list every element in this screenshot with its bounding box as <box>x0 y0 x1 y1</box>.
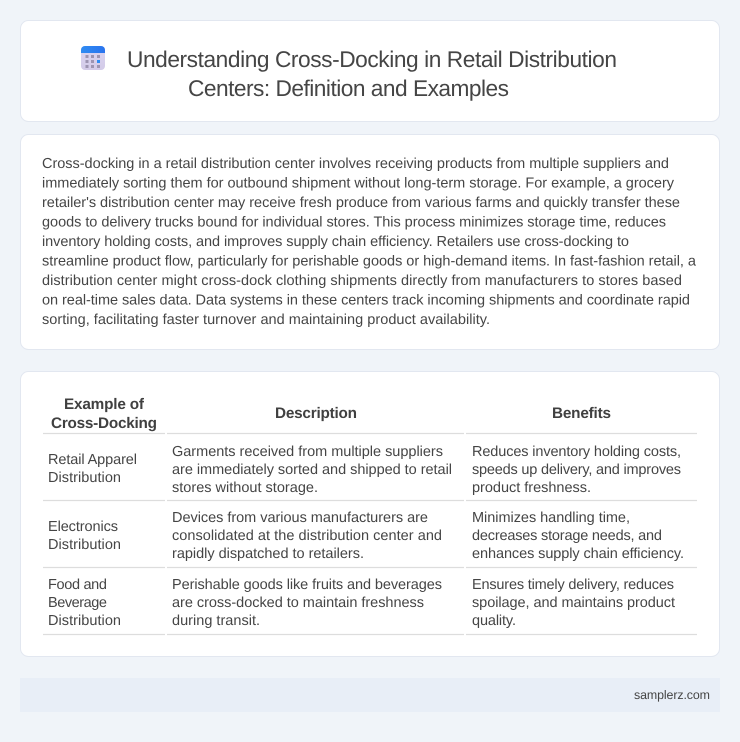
heading: title: Understanding Cross-Docking in Retail Distribution <box>127 46 617 72</box>
footer source text: samplerz.com <box>634 688 710 702</box>
text block: definition paragraph: immediately sorting them for outbound shipment without long-term storage. For example, a grocery <box>42 176 675 192</box>
table row: electronics: enhances supply chain efficiency. <box>472 546 684 562</box>
table row: electronics: consolidated at the distribution center and <box>172 528 442 544</box>
table header row <box>51 396 611 432</box>
table header row: Example of <box>64 396 145 413</box>
table row: food and beverage: Ensures timely delivery, reduces <box>472 577 674 593</box>
table row: food and beverage: quality. <box>472 613 516 629</box>
table row: electronics: Electronics <box>48 519 118 535</box>
table row: food and beverage: spoilage, and maintains product <box>472 595 675 611</box>
table row: food and beverage <box>48 577 675 629</box>
table row: electronics: Minimizes handling time, <box>472 510 630 526</box>
table header row: Cross-Docking <box>51 415 157 432</box>
text block: definition paragraph <box>42 156 697 328</box>
table row: electronics: rapidly dispatched to retailers. <box>172 546 364 562</box>
table row: retail apparel: speeds up delivery, and improves <box>472 462 681 478</box>
table row: electronics <box>48 510 684 562</box>
table row: electronics: decreases storage needs, and <box>472 528 662 544</box>
text block: definition paragraph: retailer's distribution center may receive fresh produce from various farms and quickly transfer these <box>42 195 680 211</box>
table row: retail apparel: are immediately sorted and shipped to retail <box>172 462 452 478</box>
text block: definition paragraph: sorting, facilitating faster turnover and maintaining product availability. <box>42 312 490 328</box>
text block: definition paragraph: Cross-docking in a retail distribution center involves receiving products from multiple suppliers and <box>42 156 669 172</box>
table row: retail apparel: Distribution <box>48 470 121 486</box>
table row: food and beverage: Distribution <box>48 613 121 629</box>
table row: food and beverage: Perishable goods like fruits and beverages <box>172 577 442 593</box>
table row: electronics: Devices from various manufacturers are <box>172 510 428 526</box>
table row: food and beverage: are cross-docked to maintain freshness <box>172 595 424 611</box>
table row: food and beverage: Food and <box>48 577 107 593</box>
text block: definition paragraph: inventory holding costs, and improves supply chain efficiency. Retailers use cross-docking to <box>42 234 629 250</box>
table row: retail apparel: product freshness. <box>472 480 591 496</box>
text block: definition paragraph: on real-time sales data. Data systems in these centers track incoming shipments and coordinate rapid <box>42 292 690 308</box>
table row: food and beverage: Beverage <box>48 595 107 611</box>
table row: retail apparel: Retail Apparel <box>48 452 137 468</box>
table row: food and beverage: during transit. <box>172 613 260 629</box>
table row: retail apparel <box>48 444 681 496</box>
table row: retail apparel: stores without storage. <box>172 480 318 496</box>
table row: retail apparel: Reduces inventory holding costs, <box>472 444 681 460</box>
panel: title card <box>20 20 720 122</box>
heading: title <box>127 46 617 101</box>
text block: definition paragraph: goods to delivery trucks bound for individual stores. This process minimizes storage time, reduces <box>42 214 666 230</box>
panel: examples table <box>20 372 720 656</box>
table row: electronics: Distribution <box>48 537 121 553</box>
text block: definition paragraph: streamline product flow, particularly for perishable goods or high-demand items. In fast-fashion retail, a <box>42 254 697 270</box>
panel: definition text <box>20 134 720 350</box>
table row: retail apparel: Garments received from multiple suppliers <box>172 444 443 460</box>
text block: definition paragraph: distribution center might cross-dock clothing shipments directly from manufacturers to stores based <box>42 273 682 289</box>
table header row: Benefits <box>552 405 611 422</box>
icon: calendar <box>81 46 105 70</box>
table header row: Description <box>275 405 357 422</box>
footer bar <box>20 678 720 712</box>
heading: title: Centers: Definition and Examples <box>188 75 509 101</box>
